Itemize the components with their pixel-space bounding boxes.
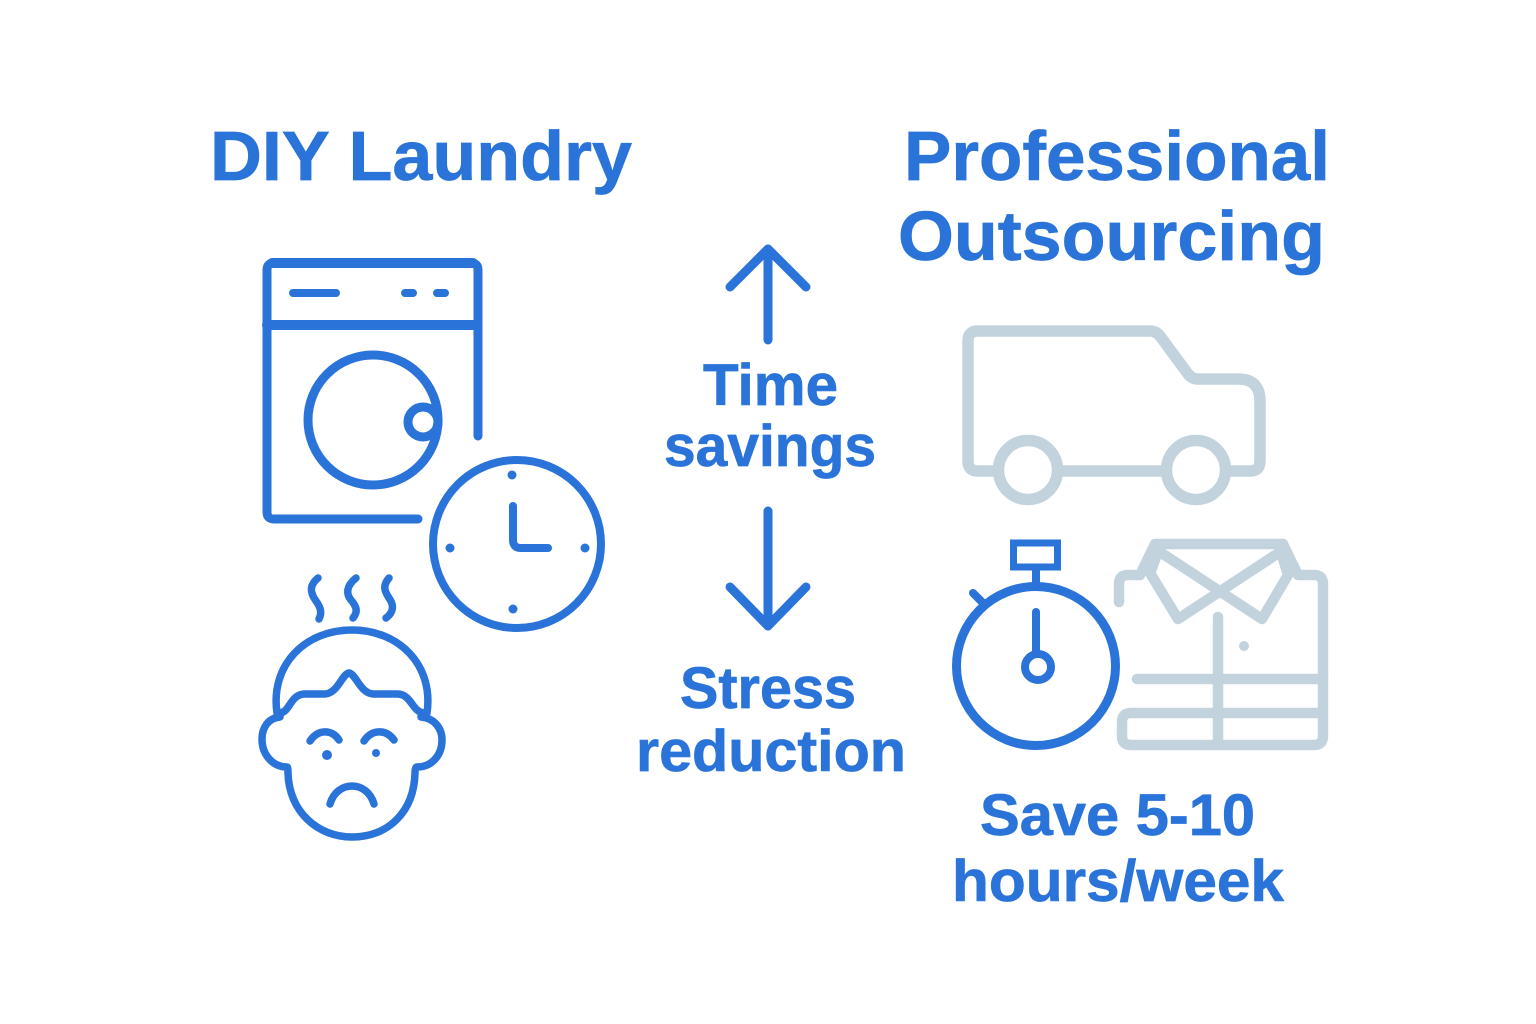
icon: folded shirt (1119, 544, 1323, 745)
heading: Professional Outsourcing: Outsourcing (898, 197, 1325, 275)
label: Stress reduction: reduction (636, 719, 906, 784)
label: Save 5-10 hours/week (952, 783, 1285, 914)
heading: Professional Outsourcing (898, 117, 1330, 275)
label: Stress reduction (636, 656, 906, 784)
label: Time savings (664, 353, 876, 479)
icon: washing machine (267, 263, 478, 519)
label: Time savings: savings (664, 414, 876, 479)
label: Stress reduction: Stress (680, 656, 856, 721)
icon: clock (433, 460, 601, 628)
label: Time savings: Time (703, 353, 838, 418)
arrow: up (730, 249, 806, 340)
icon: delivery van (968, 331, 1260, 500)
label: Save 5-10 hours/week: hours/week (952, 849, 1285, 914)
arrow: down (730, 511, 806, 626)
heading: Professional Outsourcing: Professional (904, 117, 1330, 195)
label: Save 5-10 hours/week: Save 5-10 (980, 783, 1255, 848)
icon: stressed face with steam (262, 578, 442, 837)
icon: stopwatch (956, 543, 1116, 746)
heading: DIY Laundry: DIY Laundry (210, 117, 632, 195)
